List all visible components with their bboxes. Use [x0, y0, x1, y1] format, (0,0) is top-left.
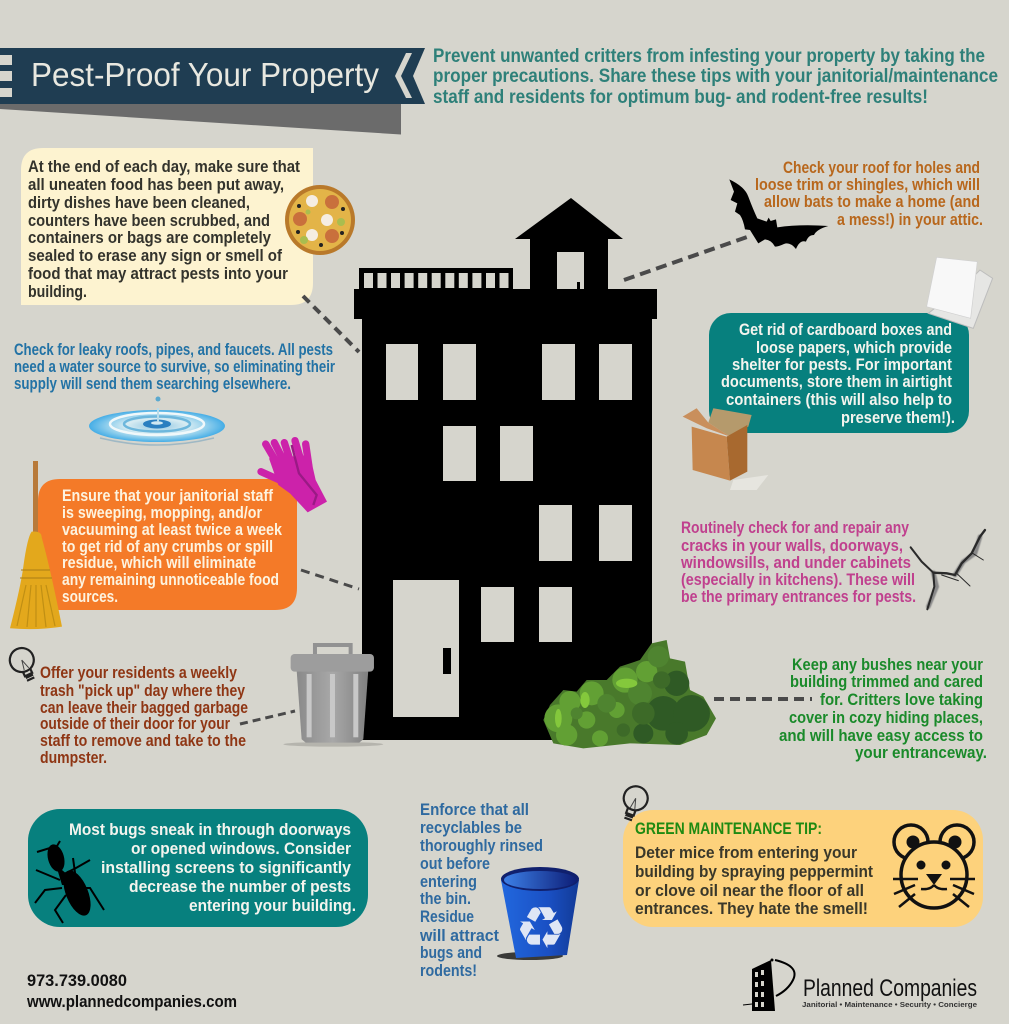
food cleanup text: containers or bags are completely — [28, 228, 271, 247]
bugs text: Most bugs sneak in through doorways — [69, 820, 351, 839]
crack tip text: Routinely check for and repair any — [681, 518, 909, 537]
crack tip text: cracks in your walls, doorways, — [681, 536, 903, 555]
title banner — [0, 48, 425, 134]
icon: gloves — [261, 441, 327, 512]
crack tip text: be the primary entrances for pests. — [681, 587, 916, 606]
trash tip text: staff to remove and take to the — [40, 731, 246, 750]
green tip text: or clove oil near the floor of all — [635, 881, 864, 900]
icon: mouse — [893, 825, 975, 908]
icon: light bulb (green tip) — [617, 783, 651, 823]
janitorial text: any remaining unnoticeable food — [62, 570, 279, 589]
cardboard text: containers (this will also help to — [726, 390, 952, 409]
icon: trash can — [283, 645, 383, 747]
bugs text: entering your building. — [189, 896, 356, 915]
trash tip text: trash "pick up" day where they — [40, 681, 245, 700]
panel: bugs and screens — [28, 809, 368, 927]
water text: need a water source to survive, so eliminating their — [14, 357, 335, 376]
trash tip text: outside of their door for your — [40, 714, 230, 733]
food cleanup text: sealed to erase any sign or smell of — [28, 246, 282, 265]
janitorial text: sources. — [62, 587, 118, 606]
cardboard text: shelter for pests. For important — [732, 355, 952, 374]
bat tip text — [755, 158, 983, 229]
connector: bush to tip — [714, 697, 812, 701]
icon: bug — [35, 841, 104, 923]
intro text: staff and residents for optimum bug- and rodent-free results! — [433, 87, 928, 108]
janitorial text: is sweeping, mopping, and/or — [62, 503, 262, 522]
green tip heading: GREEN MAINTENANCE TIP: — [635, 819, 822, 838]
connector: bat to roof — [624, 237, 747, 280]
food cleanup text: At the end of each day, make sure that — [28, 157, 300, 176]
panel: cardboard and papers — [709, 313, 969, 433]
panel: food cleanup — [21, 148, 313, 305]
icon: light bulb — [6, 644, 42, 684]
bugs text: decrease the number of pests — [129, 877, 351, 896]
water text — [14, 340, 335, 393]
intro text — [433, 46, 998, 108]
icon: recycling bin: ♻ — [515, 894, 567, 962]
panel: janitorial staff — [38, 479, 297, 610]
icon: wall crack — [911, 530, 985, 609]
cardboard text: loose papers, which provide — [756, 338, 952, 357]
crack tip text: (especially in kitchens). These will — [681, 570, 915, 589]
connector: janitorial panel to building — [301, 570, 359, 589]
recycle tip text — [419, 800, 543, 980]
cardboard text: documents, store them in airtight — [721, 372, 952, 391]
janitorial text: vacuuming at least twice a week — [62, 520, 282, 539]
icon: pizza — [285, 185, 355, 255]
icon: broom — [10, 461, 62, 629]
trash tip text: can leave their bagged garbage — [40, 698, 248, 717]
recycle tip text: out before — [420, 854, 490, 873]
green tip text — [635, 843, 873, 918]
connector: trash tip to can — [240, 711, 295, 724]
janitorial text: Ensure that your janitorial staff — [62, 486, 273, 505]
food cleanup text: building. — [28, 282, 87, 301]
food cleanup text: dirty dishes have been cleaned, — [28, 193, 250, 212]
cardboard text: Get rid of cardboard boxes and — [739, 320, 952, 339]
recycle tip text: thoroughly rinsed — [420, 836, 543, 855]
green tip text: entrances. They hate the smell! — [635, 899, 868, 918]
bush tip text: Keep any bushes near your — [792, 655, 983, 674]
icon: bat — [729, 179, 828, 249]
bush tip text: cover in cozy hiding places, — [789, 708, 983, 727]
bat tip text: a mess!) in your attic. — [837, 210, 983, 229]
bush tip text: building trimmed and cared — [790, 672, 983, 691]
icon: water ripple — [89, 396, 225, 445]
recycle tip text: recyclables be — [420, 818, 522, 837]
food cleanup text — [28, 157, 300, 301]
crack tip text — [680, 518, 916, 606]
logo — [743, 958, 977, 1011]
food cleanup text: all uneaten food has been put away, — [28, 175, 284, 194]
bush tip text — [779, 655, 987, 762]
recycle tip text: the bin. — [420, 889, 471, 908]
contact details: 973.739.0080 — [27, 971, 127, 990]
trash tip text — [40, 663, 248, 767]
green tip text: Deter mice from entering your — [635, 843, 857, 862]
crack tip text: windowsills, and under cabinets — [680, 553, 911, 572]
recycle tip text: entering — [420, 872, 477, 891]
cardboard text — [721, 320, 955, 427]
connector: food panel to building — [303, 296, 359, 352]
food cleanup text: counters have been scrubbed, and — [28, 211, 270, 230]
recycle tip text: will attract — [419, 926, 499, 945]
panel: green maintenance tip — [623, 810, 983, 927]
water text: Check for leaky roofs, pipes, and faucets. All pests — [14, 340, 333, 359]
bugs text: installing screens to significantly — [101, 858, 352, 877]
janitorial text: residue, which will eliminate — [62, 553, 256, 572]
icon: bush — [543, 640, 716, 748]
bugs text: or opened windows. Consider — [131, 839, 351, 858]
cardboard text: preserve them!). — [841, 408, 955, 427]
icon: cardboard box — [683, 408, 768, 490]
food cleanup text: food that may attract pests into your — [28, 264, 288, 283]
green tip text: building by spraying peppermint — [635, 862, 873, 881]
bugs text — [69, 820, 356, 915]
water text: supply will send them searching elsewhere. — [14, 374, 291, 393]
recycle tip text: rodents! — [420, 961, 477, 980]
contact details — [26, 971, 237, 1011]
contact details: www.plannedcompanies.com — [26, 992, 237, 1011]
title text: Pest-Proof Your Property — [31, 56, 379, 93]
bush tip text: your entranceway. — [855, 743, 987, 762]
logo tagline: Janitorial • Maintenance • Security • Concierge — [802, 1000, 977, 1009]
bush tip text: for. Critters love taking — [820, 690, 983, 709]
bush tip text: and will have easy access to — [779, 726, 983, 745]
recycle tip text: Enforce that all — [420, 800, 529, 819]
icon: recycling bin — [497, 867, 579, 962]
icon: papers — [927, 257, 993, 328]
trash tip text: Offer your residents a weekly — [40, 663, 237, 682]
janitorial text — [62, 486, 282, 606]
building silhouette — [354, 198, 657, 740]
logo building mark — [743, 958, 795, 1011]
recycle tip text: bugs and — [420, 943, 482, 962]
janitorial text: to get rid of any crumbs or spill — [62, 537, 273, 556]
recycle tip text: Residue — [420, 907, 474, 926]
trash tip text: dumpster. — [40, 748, 107, 767]
